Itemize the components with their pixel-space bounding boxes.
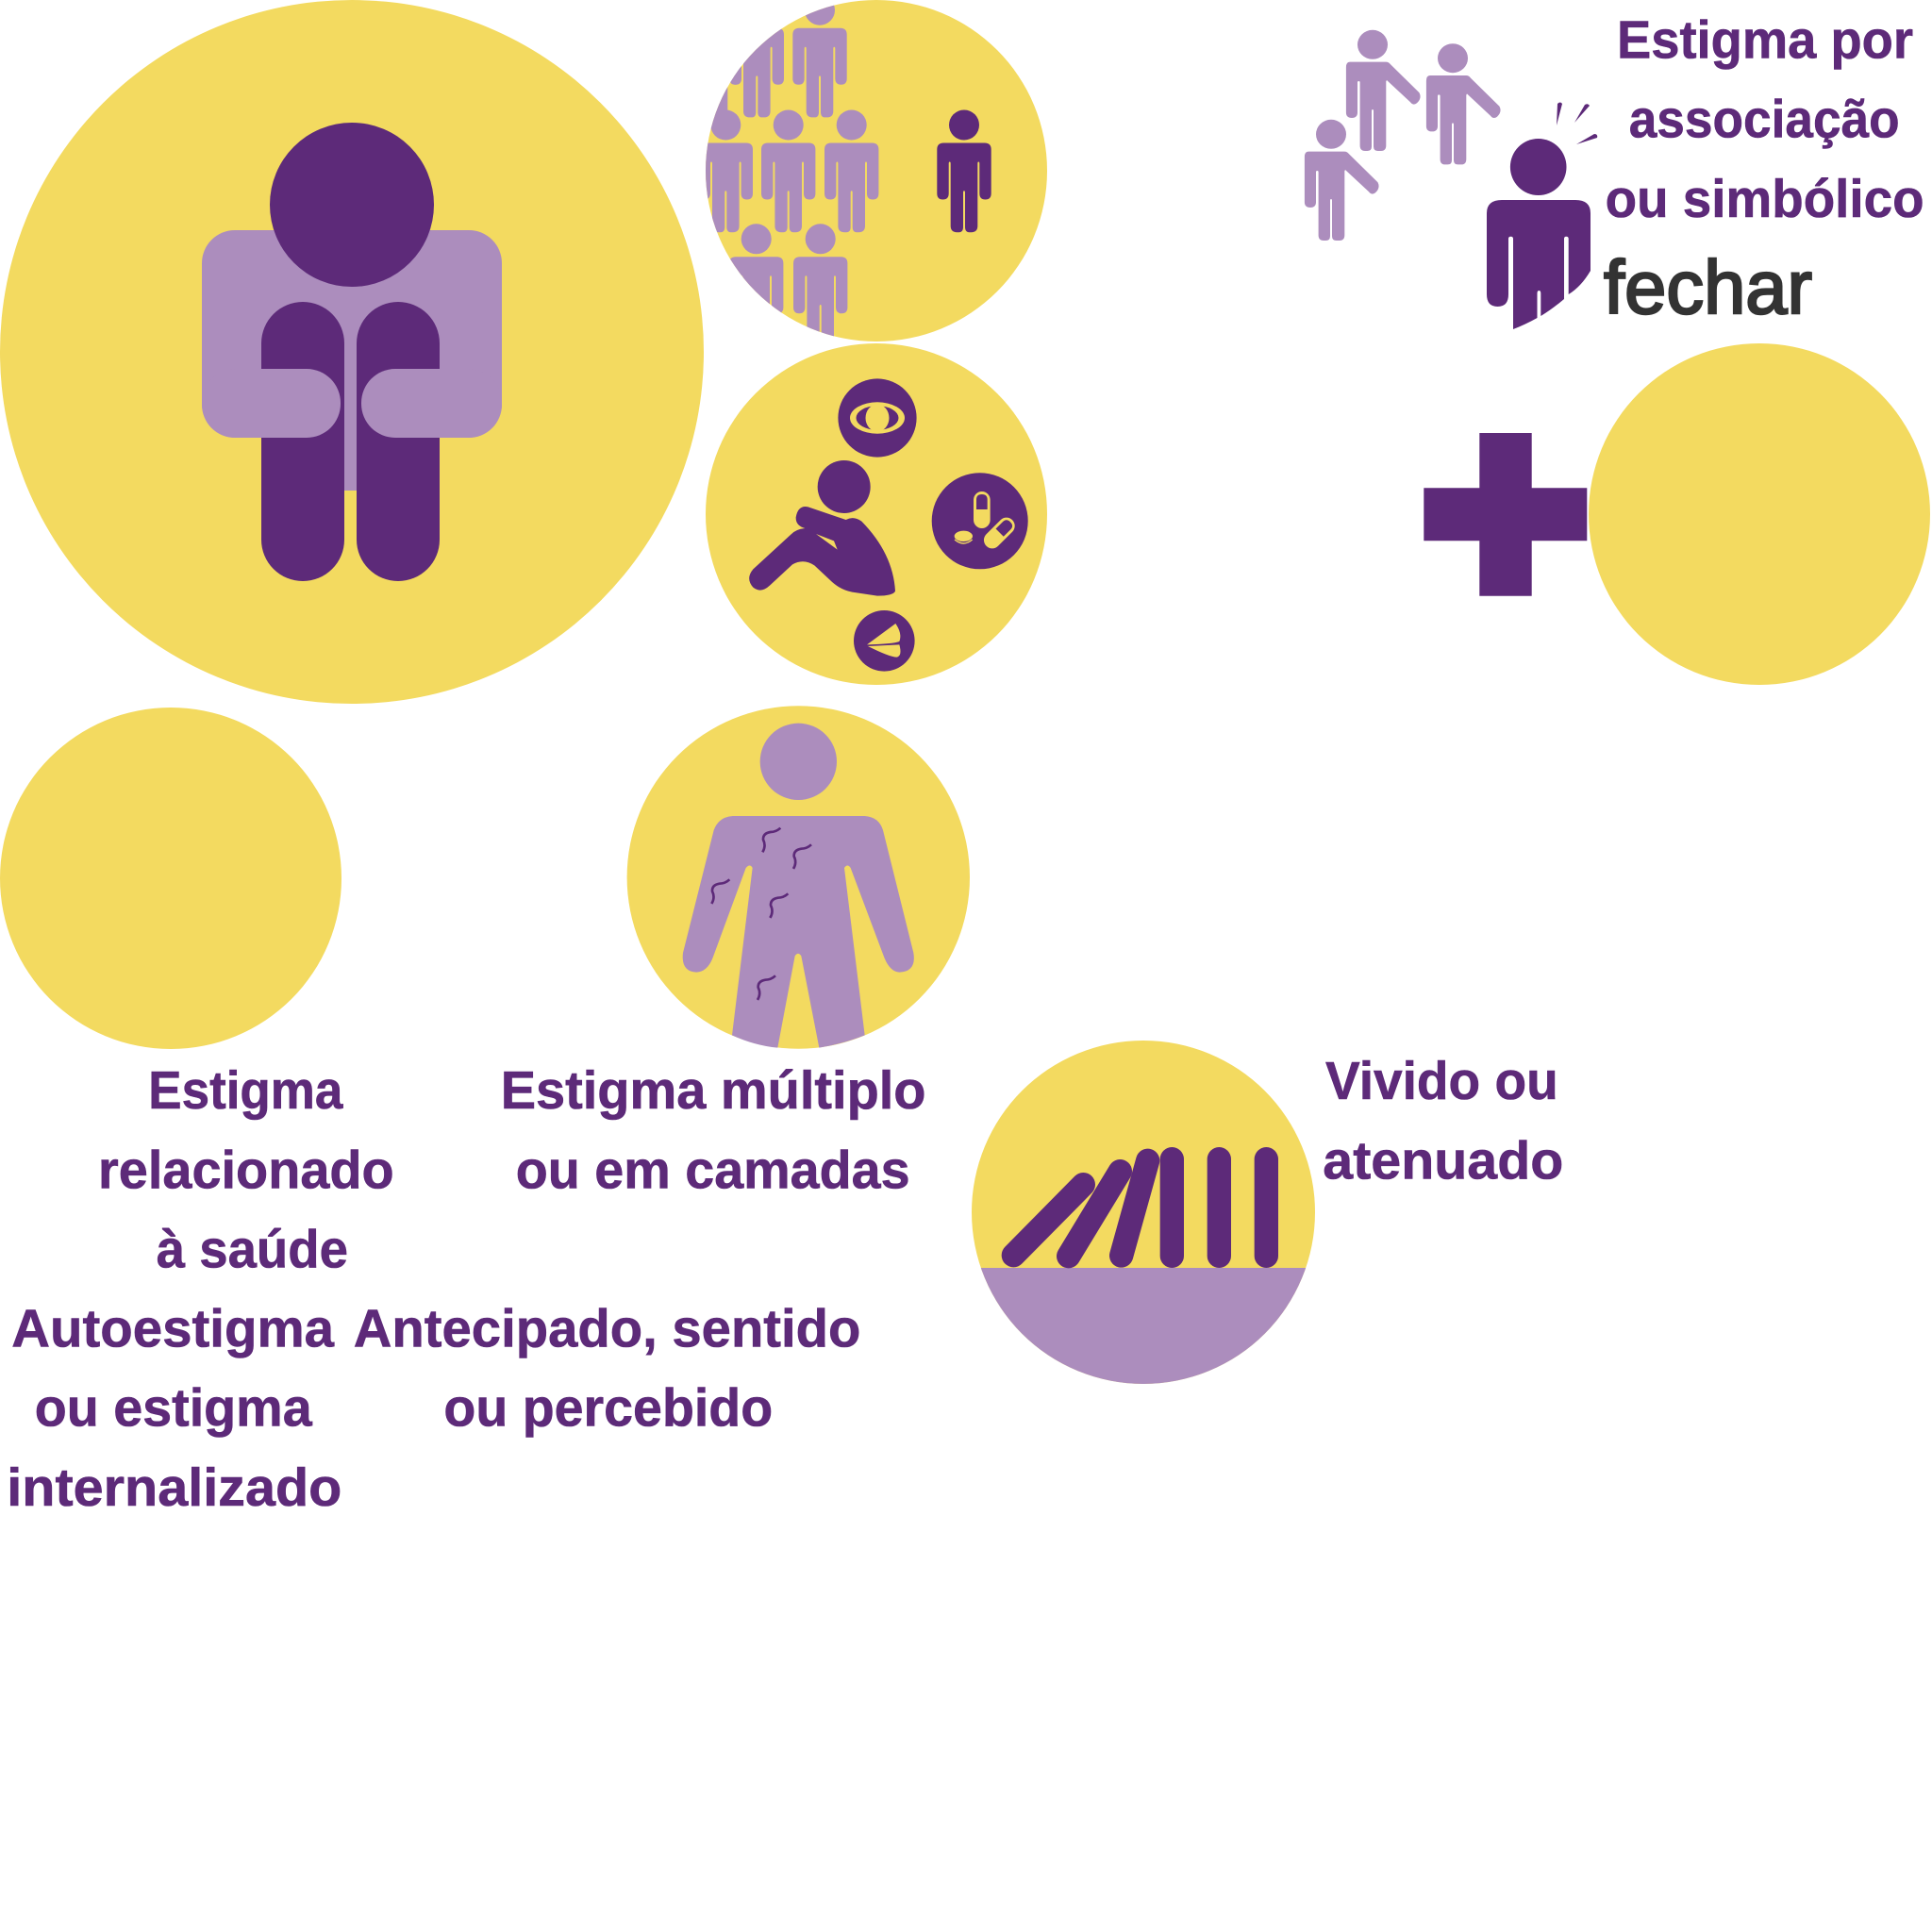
icon: isolated person [937,109,991,232]
icon: person hugging knees [202,123,502,581]
label: Autoestigma ou estigma internalizado: ou estigma [35,1378,313,1439]
label: Estigma múltiplo ou em camadas [501,1060,926,1200]
panel: circle with crowd and isolated person [687,0,1047,346]
heading: Estigma por associação ou simbólico: ou simbólico [1606,169,1924,229]
icon: eye badge [838,378,917,458]
panel: circle with body marked by squiggles [627,706,970,1049]
icon: dominoes [1013,1159,1266,1257]
label: Estigma múltiplo ou em camadas: Estigma múltiplo [501,1060,926,1121]
label: Autoestigma ou estigma internalizado [7,1298,341,1518]
panel: empty yellow circle left [0,708,341,1049]
label: Vivido ou atenuado: Vivido ou [1325,1051,1558,1111]
label: Antecipado, sentido ou percebido [354,1298,860,1439]
icon: sitting person [749,460,895,596]
icon: stigmatised dark figure [1487,102,1597,329]
label: Antecipado, sentido ou percebido: ou percebido [443,1378,773,1439]
label: Autoestigma ou estigma internalizado: Autoestigma [11,1298,335,1358]
panel: circle with falling dominoes [972,1041,1315,1385]
panel: large circle with huddled person [0,0,704,704]
label: Autoestigma ou estigma internalizado: internalizado [7,1457,341,1518]
label: Estigma relacionado à saúde: relacionado [98,1140,394,1200]
label: Estigma relacionado à saúde [98,1060,394,1280]
heading: Estigma por associação ou simbólico: Estigma por [1617,10,1913,71]
panel: empty yellow circle right [1589,343,1930,685]
icon: pills badge [932,473,1028,569]
label: Estigma relacionado à saúde: à saúde [157,1220,348,1280]
panel: top-right person pointed at by others [1305,30,1597,329]
icon: lavender body figure with marks [683,724,914,1048]
label: Antecipado, sentido ou percebido: Antecipado, sentido [354,1298,860,1358]
icon: plus sign [1424,433,1587,596]
label: Estigma relacionado à saúde: Estigma [148,1060,343,1121]
close link: fechar: fechar [1604,245,1812,329]
icon: crowd of lavender people [706,6,879,336]
heading: Estigma por associação ou simbólico: associação [1629,90,1900,150]
icon: pointing lavender figures [1305,30,1501,241]
label: Vivido ou atenuado: atenuado [1323,1130,1563,1191]
panel: circle with sad person and health icons [706,343,1047,685]
label: Estigma múltiplo ou em camadas: ou em camadas [516,1140,910,1200]
heading: Estigma por associação ou simbólico [1606,10,1924,229]
label: Vivido ou atenuado [1323,1051,1563,1191]
icon: broken tablet badge [854,610,915,672]
ground band [972,1268,1315,1385]
